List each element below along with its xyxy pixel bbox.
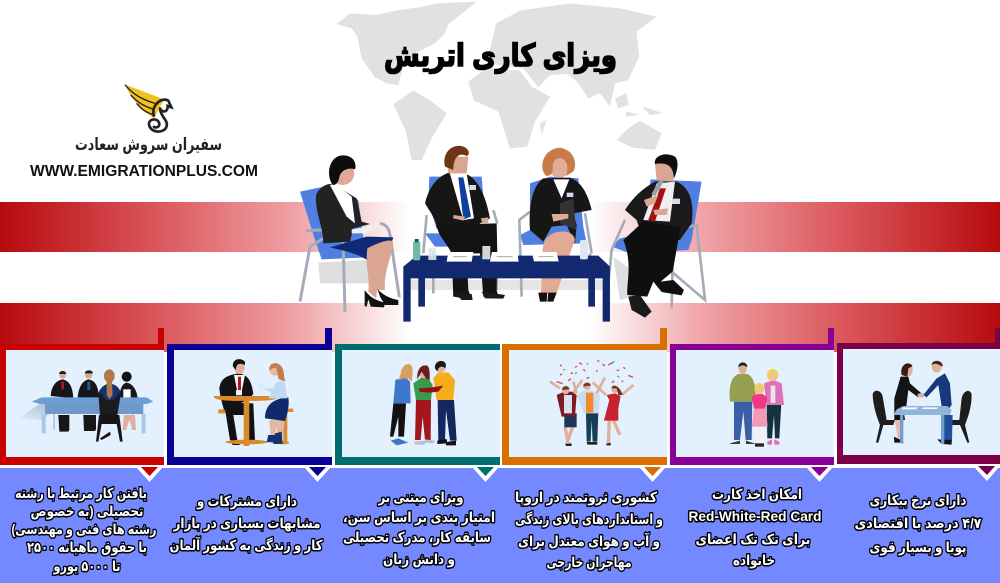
text: panel 5: Red-White-Red Card xyxy=(688,508,822,524)
person: man speaking into microphone xyxy=(608,154,705,318)
text: panel 3: ویزای مبتنی بر xyxy=(378,489,464,506)
text: panel 4 xyxy=(515,489,663,571)
pointer xyxy=(639,467,666,482)
text: panel 5: برای تک تک اعضای xyxy=(696,531,810,548)
card frame xyxy=(167,328,332,465)
pointer xyxy=(136,467,163,482)
text: panel 1: تا ۵۰۰۰ یورو xyxy=(53,558,121,575)
icon: business handshake across a table xyxy=(873,361,972,445)
panel 4: wealthy country xyxy=(502,328,667,482)
icon: three people celebrating with confetti xyxy=(550,361,633,446)
card frame xyxy=(837,328,1000,464)
title: ویزای کاری اتریش xyxy=(384,38,617,74)
panel 5: Red-White-Red Card xyxy=(670,328,834,482)
text: panel 1: رشته های فنی و مهندسی) xyxy=(12,521,156,538)
text: panel 2: دارای مشترکات و xyxy=(196,493,297,510)
blue footer strip xyxy=(0,468,1000,583)
text: panel 3: سابقه کار، مدرک تحصیلی xyxy=(343,529,491,545)
table with water bottles and name cards xyxy=(403,239,610,322)
text: panel 5: امکان اخذ کارت xyxy=(712,486,802,502)
website: WWW.EMIGRATIONPLUS.COM xyxy=(30,163,258,180)
text: panel 2: مشابهات بسیاری در بازار xyxy=(173,515,320,532)
card frame xyxy=(502,328,667,465)
icon: two people talking at a cafe table xyxy=(214,359,293,446)
pointer xyxy=(472,467,499,482)
card frame xyxy=(335,344,500,465)
text: panel 2 xyxy=(170,493,323,554)
panel 3: points-based visa xyxy=(335,344,500,482)
person: man in blue tie xyxy=(423,146,505,300)
text: panel 1: یافتن کار مرتبط با رشته xyxy=(15,485,147,502)
pointer xyxy=(806,467,833,482)
text: panel 4: مهاجران خارجی xyxy=(546,554,632,571)
card frame xyxy=(670,328,834,465)
person: woman with auburn hair xyxy=(519,148,592,302)
pointer xyxy=(973,466,1000,481)
text: panel 4: کشوری ثروتمند در اروپا xyxy=(515,489,658,506)
card frame xyxy=(0,328,164,465)
logo: emblem, name and website xyxy=(30,85,258,180)
icon: winged bird emblem xyxy=(125,85,171,132)
icon: job interview at table xyxy=(17,369,153,442)
text: panel 4: و آب و هوای معتدل برای xyxy=(518,532,660,550)
pointer xyxy=(304,467,331,482)
text: panel 5: خانواده xyxy=(733,552,775,569)
flag stripes background xyxy=(0,202,1000,352)
text: panel 1: تحصیلی (به خصوص xyxy=(30,503,144,520)
text: panel 6: ۴/۷ درصد با اقتصادی xyxy=(854,515,982,531)
text: panel 3: و دانش زبان xyxy=(383,551,455,568)
panel 2: similarities with Germany xyxy=(167,328,332,482)
panel 6: low unemployment xyxy=(837,328,1000,481)
main illustration: panel interview around a table xyxy=(300,146,705,322)
person: woman taking notes xyxy=(300,155,399,312)
text: panel 3 xyxy=(343,489,495,568)
text: panel 6: پویا و بسیار قوی xyxy=(870,539,966,556)
world map xyxy=(337,2,663,160)
text: panel 1: با حقوق ماهیانه ۲۵۰۰ xyxy=(27,539,147,556)
icon: three students reading a book xyxy=(390,361,457,445)
text: panel 6 xyxy=(854,492,982,556)
text: panel 3: امتیاز بندی بر اساس سن، xyxy=(343,509,495,526)
text: panel 4: و استانداردهای بالای زندگی xyxy=(515,511,663,528)
panel 1: job related to field of study xyxy=(0,328,164,482)
icon: family of three xyxy=(730,362,784,447)
text: panel 5 xyxy=(688,486,822,569)
text: panel 1 xyxy=(12,485,156,575)
company name: سفیران سروش سعادت xyxy=(75,135,222,155)
text: panel 2: کار و زندگی به کشور آلمان xyxy=(170,536,323,554)
text: panel 6: دارای نرخ بیکاری xyxy=(870,492,966,509)
